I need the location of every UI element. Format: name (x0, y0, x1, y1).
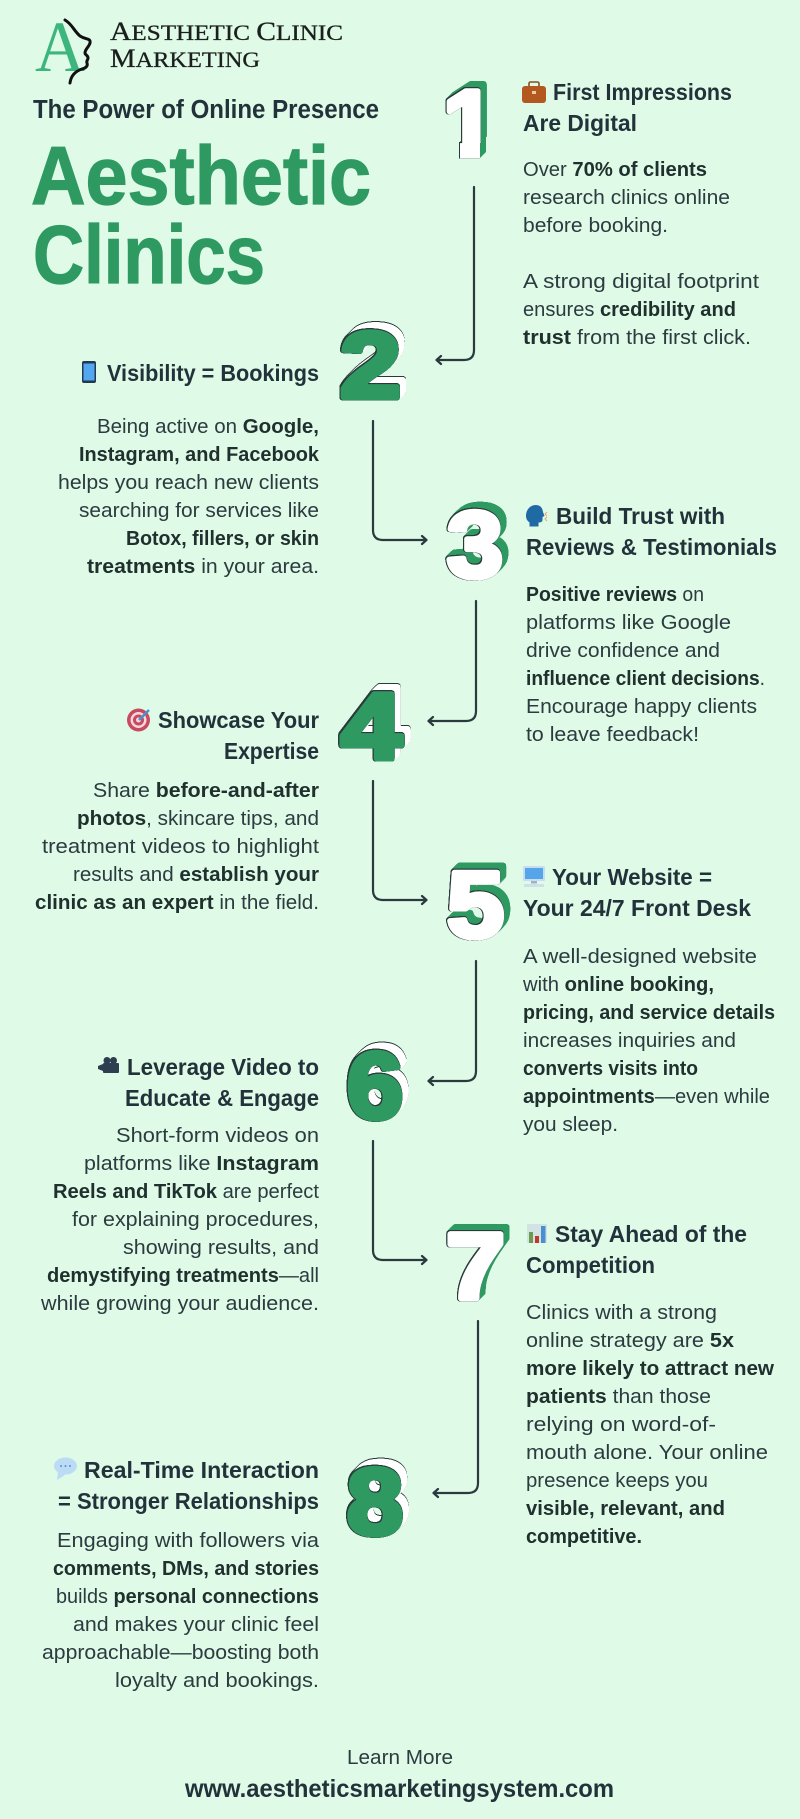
text block: converts visits into (523, 1058, 698, 1080)
heading (58, 1457, 319, 1514)
heading: Leverage Video to (127, 1054, 319, 1080)
arrow: 7 to 8 (434, 1321, 478, 1497)
text block: Engaging with followers via (57, 1530, 320, 1552)
text block: patients than those (526, 1386, 711, 1408)
icon: video camera (98, 1057, 119, 1073)
main title: Aesthetic (31, 129, 371, 222)
text block: searching for services like (79, 500, 319, 522)
text block: Encourage happy clients (526, 696, 757, 718)
heading: First Impressions (553, 79, 732, 105)
panel: 1 First Impressions Are Digital (522, 79, 759, 349)
text block: treatment videos to highlight (42, 836, 319, 858)
text block: approachable—boosting both (42, 1642, 319, 1664)
heading: Build Trust with (556, 503, 725, 529)
text block: appointments—even while (523, 1086, 770, 1108)
text block: mouth alone. Your online (526, 1442, 768, 1464)
heading (125, 1054, 319, 1111)
text block (58, 416, 320, 578)
numeral 5: 5 (447, 852, 504, 957)
heading (526, 1221, 747, 1278)
text block: A strong digital footprint (523, 271, 759, 293)
text block (35, 780, 319, 914)
text block: and makes your clinic feel (73, 1614, 319, 1636)
text block: Being active on Google, (97, 416, 319, 438)
text block: online strategy are 5x (526, 1330, 734, 1352)
logo wordmark: AESTHETIC CLINIC (110, 17, 343, 46)
heading: Are Digital (523, 110, 637, 136)
arrow: 6 to 7 (373, 1141, 426, 1264)
text block: ensures credibility and (523, 299, 736, 321)
panel: 5 Your Website = Your 24/7 Front Desk (522, 864, 775, 1136)
arrow: 4 to 5 (373, 781, 426, 904)
text block: photos, skincare tips, and (77, 808, 319, 830)
heading: Educate & Engage (125, 1085, 319, 1111)
text block: Over 70% of clients (523, 159, 707, 181)
text block: helps you reach new clients (58, 472, 319, 494)
panel: 4 Showcase Your Expertise (35, 707, 319, 914)
text block: drive confidence and (526, 640, 720, 662)
icon: target (127, 708, 150, 732)
text block: presence keeps you (526, 1470, 708, 1492)
heading: Your Website = (552, 864, 712, 890)
icon: briefcase (522, 82, 546, 103)
text block: pricing, and service details (523, 1002, 775, 1024)
text block: builds personal connections (56, 1586, 319, 1608)
numeral 4: 4 (341, 674, 402, 778)
text block: for explaining procedures, (72, 1209, 319, 1231)
heading: = Stronger Relationships (58, 1488, 319, 1514)
arrow: 3 to 4 (428, 601, 476, 725)
icon: speech bubble (54, 1458, 77, 1480)
text block: Short-form videos on (116, 1125, 319, 1147)
text block: competitive. (526, 1526, 642, 1548)
text block: Instagram, and Facebook (79, 444, 320, 466)
text block: platforms like Google (526, 612, 731, 634)
text block (526, 584, 765, 746)
heading: Your 24/7 Front Desk (523, 895, 752, 921)
logo wordmark: MARKETING (110, 44, 260, 73)
numeral 2: 2 (340, 312, 401, 418)
main title (31, 129, 371, 301)
text block: influence client decisions. (526, 668, 765, 690)
text block: more likely to attract new (526, 1358, 774, 1380)
text block: trust from the first click. (523, 327, 751, 349)
text block: visible, relevant, and (526, 1498, 725, 1520)
text block: Botox, fillers, or skin (126, 528, 319, 550)
heading (523, 864, 752, 921)
text block: relying on word-of- (526, 1414, 716, 1436)
text block: Positive reviews on (526, 584, 704, 606)
text block (522, 946, 775, 1136)
heading (523, 79, 732, 136)
text block (42, 1530, 320, 1692)
text block (523, 159, 759, 349)
icon: speaking head (526, 505, 547, 526)
text block: A well-designed website (523, 946, 757, 968)
logo: Aesthetic Clinic Marketing (35, 7, 343, 87)
text block: demystifying treatments—all (47, 1265, 319, 1287)
heading: Stay Ahead of the (555, 1221, 747, 1247)
text block: Reels and TikTok are perfect (53, 1181, 319, 1203)
numeral 8: 8 (347, 1449, 403, 1554)
heading (526, 503, 777, 560)
text block: Share before-and-after (93, 780, 319, 802)
text block: to leave feedback! (526, 724, 699, 746)
text block: results and establish your (73, 864, 319, 886)
panel: 6 Leverage Video to Educate and Engage (40, 1054, 319, 1315)
heading: Reviews & Testimonials (526, 534, 777, 560)
numeral 7: 7 (446, 1214, 505, 1318)
icon: mobile phone (82, 361, 96, 383)
website url: www.aestheticsmarketingsystem.com (184, 1775, 614, 1803)
panel: 3 Build Trust with Reviews and Testimonials (526, 503, 777, 746)
text block: clinic as an expert in the field. (35, 892, 319, 914)
main title: Clinics (33, 208, 265, 301)
icon: desktop computer (523, 866, 545, 887)
logo wordmark (110, 17, 343, 73)
text block: treatments in your area. (87, 556, 319, 578)
heading: Competition (526, 1252, 655, 1278)
text block: research clinics online (523, 187, 730, 209)
panel: 2 Visibility = Bookings (58, 360, 320, 578)
text block: with online booking, (522, 974, 714, 996)
footer (184, 1747, 614, 1803)
text block: before booking. (523, 215, 668, 237)
text block: platforms like Instagram (84, 1153, 319, 1175)
text block (40, 1125, 319, 1315)
text block: showing results, and (123, 1237, 319, 1259)
heading (158, 707, 319, 764)
text block: comments, DMs, and stories (53, 1558, 319, 1580)
subtitle: The Power of Online Presence (33, 96, 379, 124)
learn more label: Learn More (347, 1747, 453, 1769)
numeral 3: 3 (447, 492, 503, 597)
text block: increases inquiries and (523, 1030, 736, 1052)
heading: Real-Time Interaction (84, 1457, 319, 1483)
numeral 1: 1 (443, 70, 495, 176)
logo mark: letter A with face profile: A (35, 7, 85, 87)
heading: Visibility = Bookings (107, 360, 319, 386)
heading: Expertise (224, 738, 319, 764)
arrow: 5 to 6 (428, 961, 476, 1085)
text block: you sleep. (523, 1114, 618, 1136)
text block (526, 1302, 774, 1548)
arrow: 2 to 3 (373, 421, 426, 544)
text block: while growing your audience. (40, 1293, 319, 1315)
panel: 8 Real-Time Interaction = Stronger Relationships (42, 1457, 320, 1692)
text block: loyalty and bookings. (115, 1670, 319, 1692)
heading: Showcase Your (158, 707, 319, 733)
numeral 6: 6 (347, 1033, 403, 1138)
arrow: 1 to 2 (436, 187, 474, 364)
panel: 7 Stay Ahead of the Competition (526, 1221, 774, 1548)
text block: Clinics with a strong (526, 1302, 717, 1324)
icon: bar chart (527, 1224, 547, 1243)
